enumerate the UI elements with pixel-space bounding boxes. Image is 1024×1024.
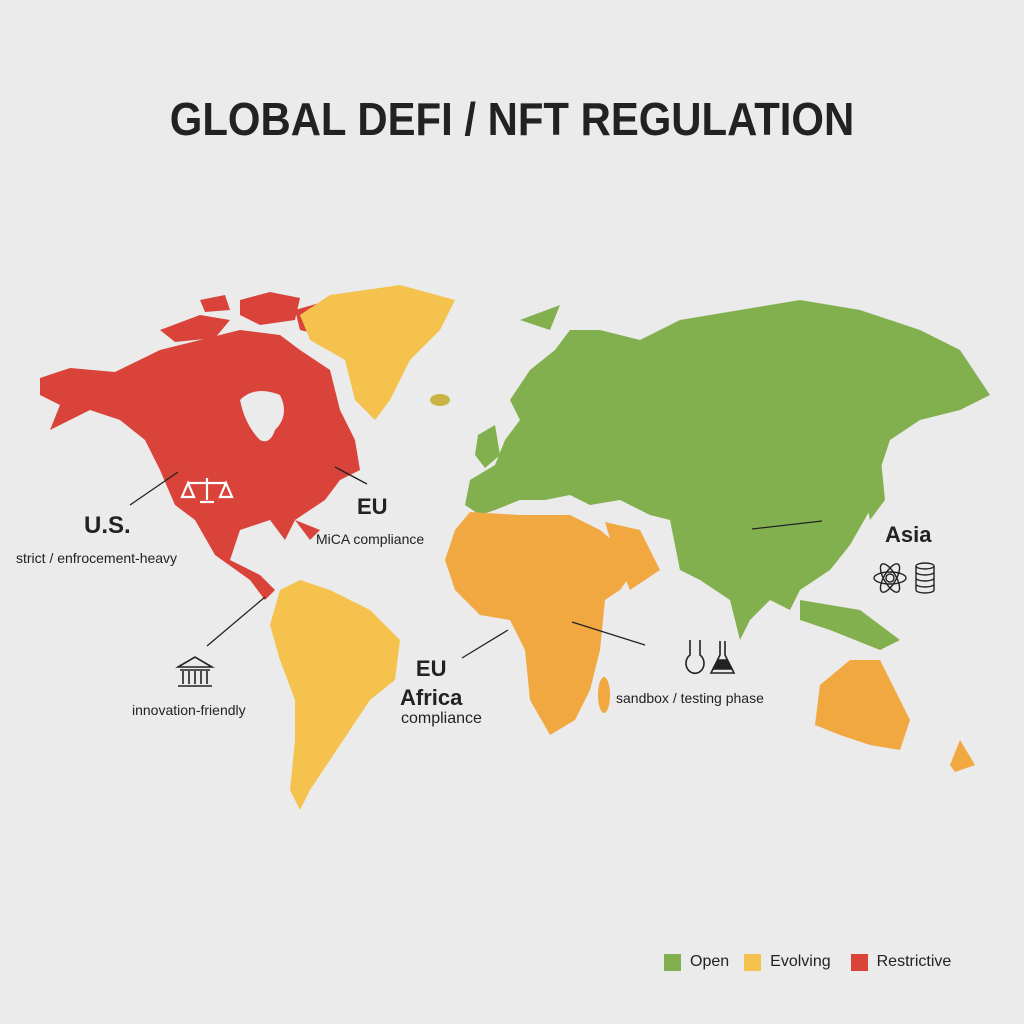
label: U.S. note: strict / enfrocement-heavy [16, 550, 177, 566]
icon: atom and coins [874, 561, 934, 595]
icon: bank [178, 657, 212, 686]
icon: flasks [686, 640, 734, 673]
label: EU Africa: Africa [400, 685, 462, 710]
region: south america (evolving) [270, 580, 400, 810]
icon: scales [182, 478, 232, 502]
region: eurasia (open) [465, 300, 990, 650]
region: greenland (evolving) [300, 285, 455, 420]
label: EU note: MiCA compliance [316, 531, 424, 547]
label: EU: EU [357, 494, 388, 519]
label: Asia: Asia [885, 522, 931, 547]
region: north america (restrictive) [40, 292, 360, 600]
leader lines [130, 467, 822, 658]
label: U.S.: U.S. [84, 512, 131, 539]
region: australia [815, 660, 910, 750]
label: sandbox: sandbox / testing phase [616, 690, 764, 706]
legend: Open Evolving Restrictive [690, 953, 951, 970]
label: EU Africa [400, 656, 462, 710]
label: EU Africa: EU [416, 656, 446, 681]
region: africa (evolving) [445, 512, 975, 772]
label: innovation-friendly: innovation-friendly [132, 702, 246, 718]
title: GLOBAL DEFI / NFT REGULATION [170, 93, 854, 145]
label: Africa note: compliance [401, 710, 482, 727]
